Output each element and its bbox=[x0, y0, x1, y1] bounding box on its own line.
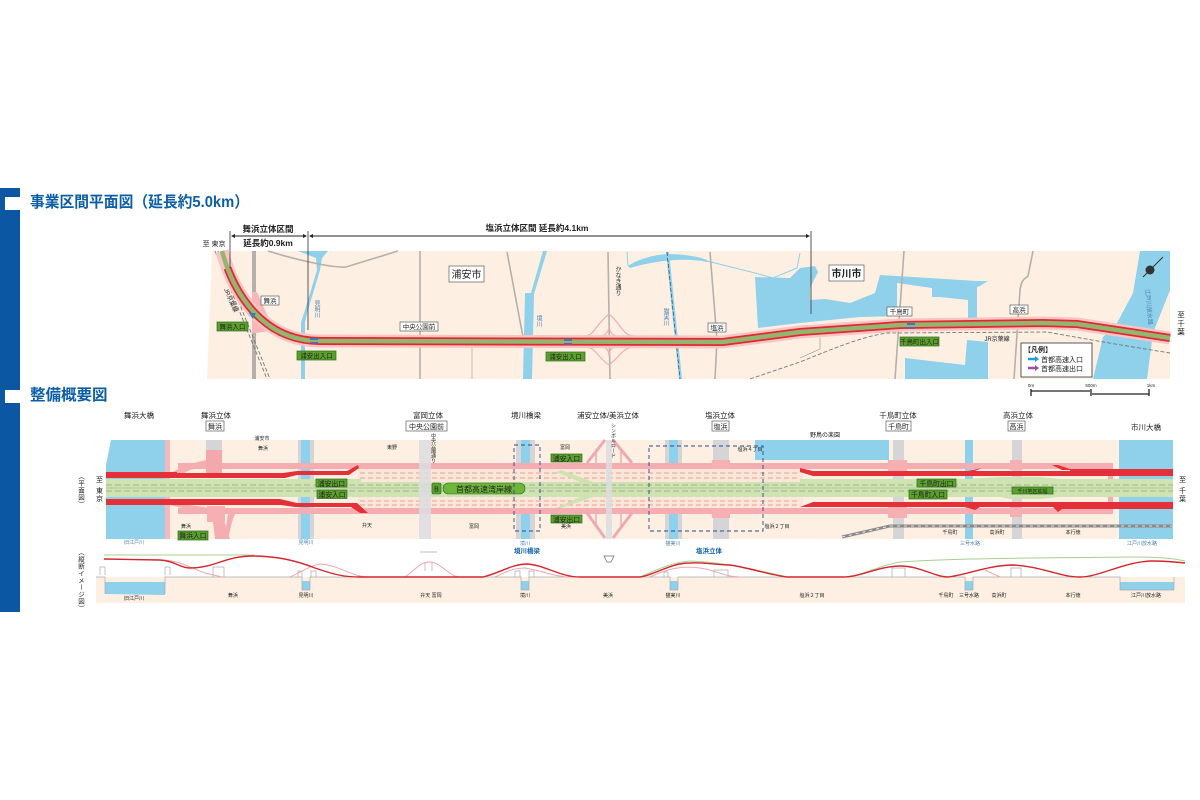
plan small labels: 弁天 bbox=[362, 522, 372, 529]
overview green labels: 千鳥町入口 bbox=[911, 490, 945, 499]
railway bbox=[842, 526, 1172, 537]
profile labels: 三号水路 bbox=[959, 592, 979, 599]
central light zone with dashes bbox=[358, 469, 803, 508]
new red lanes lower bbox=[106, 499, 368, 513]
station labels: 舞浜 bbox=[264, 296, 277, 305]
map small text: かなき通り bbox=[614, 266, 621, 296]
plan small labels: 江戸川放水路 bbox=[1127, 540, 1157, 547]
panel: plan map bbox=[207, 251, 1170, 379]
profile labels: 江戸川放水路 bbox=[1131, 592, 1161, 599]
legend: 首都高速出口 bbox=[1041, 364, 1083, 373]
column headers: 舞浜大橋 bbox=[124, 410, 154, 420]
overview green labels: 千川地区拡幅 bbox=[1017, 488, 1048, 495]
red elevation line bbox=[104, 556, 1185, 577]
dimension: Maihama section bbox=[203, 224, 308, 330]
column headers: 千鳥町立体 bbox=[879, 410, 917, 420]
legend bbox=[1021, 343, 1092, 377]
column headers bbox=[124, 410, 1161, 432]
plan small labels: 富岡 bbox=[469, 523, 479, 530]
streets over lanes bbox=[419, 440, 612, 539]
side labels bbox=[76, 473, 1186, 612]
scale bar bbox=[1028, 383, 1155, 396]
overview green labels: 千鳥町出口 bbox=[920, 479, 953, 488]
overview green labels: 浦安出口 bbox=[318, 479, 345, 488]
plan small labels: 舞浜 bbox=[258, 445, 268, 452]
maihama ramp bbox=[252, 292, 274, 333]
plan small labels: 東野 bbox=[387, 444, 397, 451]
legend: 【凡例】 bbox=[1024, 345, 1052, 354]
side roads bbox=[254, 251, 1033, 379]
heading: project section plan: 事業区間平面図（延長約5.0km） bbox=[30, 192, 249, 211]
cross streets bbox=[165, 440, 1022, 539]
expressway name badge: 首都高速湾岸線 bbox=[456, 484, 512, 494]
station labels: 中央公園前 bbox=[403, 322, 436, 331]
overview green labels: 舞浜入口 bbox=[179, 531, 207, 540]
plan small labels: 旧江戸川 bbox=[124, 539, 144, 546]
entrance labels: 浦安出入口 bbox=[300, 351, 333, 360]
sidebar band bbox=[0, 188, 20, 612]
column headers: 千鳥町 bbox=[888, 422, 909, 431]
profile labels: 見明川 bbox=[298, 593, 314, 599]
station labels: 塩浜 bbox=[710, 323, 724, 332]
plan small labels: 富岡 bbox=[560, 444, 570, 451]
profile labels: 境川 bbox=[520, 592, 530, 599]
dimension: Maihama section: 舞浜立体区間 bbox=[242, 224, 294, 234]
plan small labels bbox=[124, 423, 1157, 547]
interchange junction squares bbox=[206, 450, 1022, 522]
profile bridge piers bbox=[96, 552, 1174, 594]
scale bar: 0m bbox=[1028, 383, 1034, 388]
scale bar: 500m bbox=[1085, 383, 1097, 388]
column headers: 塩浜立体 bbox=[705, 410, 735, 420]
profile labels bbox=[124, 592, 1161, 602]
plan small labels: 中央公園通り bbox=[430, 432, 436, 464]
Urayasu interchange bbox=[587, 440, 632, 538]
column headers: 富岡立体 bbox=[413, 410, 443, 420]
plan small labels: シンボルロード bbox=[610, 423, 616, 458]
label: Ichikawa city: 市川市 bbox=[832, 267, 862, 280]
label: to Chiba (map): 至千葉 bbox=[1176, 311, 1186, 337]
map small text: 見明川 bbox=[313, 300, 320, 318]
overview green labels: 浦安入口 bbox=[318, 490, 346, 499]
dimension: Maihama section: 延長約0.9km bbox=[243, 238, 293, 248]
frontage roads bbox=[170, 460, 1113, 539]
column headers: 中央公園前 bbox=[409, 422, 444, 431]
plan small labels: 本行徳 bbox=[1065, 529, 1081, 536]
plan small labels: 浦安市 bbox=[254, 435, 270, 442]
column headers: 高浜 bbox=[1010, 422, 1024, 431]
map small text: 江戸川放水路 bbox=[1143, 289, 1155, 325]
side labels: 至 千葉 bbox=[1178, 476, 1186, 503]
road red outer bbox=[222, 251, 1170, 342]
map small text bbox=[222, 266, 1155, 343]
water bodies bbox=[298, 251, 1170, 379]
plan small labels: 見明川 bbox=[298, 540, 314, 546]
profile labels: 弁天 富岡 bbox=[420, 592, 442, 599]
column headers: 浦安立体/美浜立体 bbox=[577, 410, 640, 420]
railways bbox=[215, 251, 1170, 379]
scale bar: 1km bbox=[1147, 383, 1155, 388]
profile labels: 高浜町 bbox=[991, 592, 1007, 599]
interchange arrows bbox=[249, 313, 915, 345]
profile labels: 塩浜２丁目 bbox=[799, 592, 825, 599]
ground band bbox=[96, 577, 1185, 603]
plan small labels: 舞浜 bbox=[181, 523, 191, 530]
map small text: 猫実川 bbox=[662, 307, 669, 326]
plan small labels: 塩浜４丁目 bbox=[737, 446, 763, 453]
entrance labels: 浦安出入口 bbox=[549, 352, 582, 361]
plan small labels: 野鳥の楽園 bbox=[810, 431, 840, 439]
side labels: 至 東京 bbox=[96, 476, 103, 503]
map background bbox=[207, 251, 1170, 379]
expressway name badge: B bbox=[434, 486, 439, 494]
side labels: （縦断イメージ図） bbox=[76, 549, 85, 612]
dimension: Shiohama section bbox=[309, 223, 811, 314]
expressway lanes bbox=[106, 470, 1173, 508]
side labels: （平面図） bbox=[76, 473, 85, 508]
profile labels: 本行徳 bbox=[1065, 592, 1081, 599]
entrance labels: 千鳥町出入口 bbox=[900, 337, 939, 346]
existing road pink line bbox=[160, 560, 1000, 577]
overview green labels: 浦安出口 bbox=[553, 515, 580, 524]
heading: improvement overview: 整備概要図 bbox=[30, 386, 108, 404]
profile labels: 旧江戸川 bbox=[124, 595, 144, 602]
profile labels: 猫実川 bbox=[665, 592, 681, 599]
profile labels: 舞浜 bbox=[228, 592, 238, 599]
column headers: 舞浜 bbox=[208, 422, 222, 431]
plan small labels: 千鳥町 bbox=[942, 529, 958, 536]
column headers: 舞浜立体 bbox=[201, 410, 231, 420]
plan small labels: 塩浜２丁目 bbox=[764, 523, 790, 530]
river sections bbox=[105, 581, 1174, 595]
green line bbox=[104, 555, 1185, 577]
column headers: 高浜立体 bbox=[1003, 410, 1033, 420]
interchange ramps bbox=[585, 314, 634, 365]
Sakai river box bbox=[514, 445, 540, 531]
plan small labels: 境川 bbox=[520, 540, 530, 547]
map small text: 境川 bbox=[535, 314, 542, 327]
dimension: Maihama section: 至 東京 bbox=[203, 239, 225, 248]
new red lanes upper bbox=[106, 465, 1173, 513]
profile labels: 千鳥町 bbox=[938, 592, 954, 599]
label: Ichikawa city bbox=[829, 265, 864, 281]
compass icon bbox=[1143, 257, 1163, 277]
Shiohama section box bbox=[649, 446, 763, 531]
road green centre bbox=[222, 251, 1170, 342]
plan water bbox=[106, 440, 1173, 539]
column headers: 市川大橋 bbox=[1131, 422, 1161, 432]
label: Urayasu city bbox=[449, 266, 484, 282]
profile section names: 境川橋梁 bbox=[514, 546, 540, 555]
road casing bbox=[222, 251, 1170, 342]
entrance labels bbox=[217, 322, 939, 361]
station labels bbox=[261, 296, 1028, 332]
panel: longitudinal profile bbox=[96, 546, 1185, 603]
label: Urayasu city: 浦安市 bbox=[452, 268, 482, 281]
profile labels: 美浜 bbox=[603, 592, 613, 599]
column headers: 境川橋梁 bbox=[511, 410, 541, 420]
overview green labels bbox=[178, 454, 1053, 540]
map small text: JR京葉線 bbox=[222, 287, 240, 313]
panel: overview plan bbox=[106, 423, 1173, 547]
plan small labels: 猫実川 bbox=[665, 540, 681, 547]
plan small labels: 高浜町 bbox=[989, 529, 1005, 536]
legend: 首都高速入口 bbox=[1041, 355, 1083, 364]
station labels: 千鳥町 bbox=[890, 307, 910, 316]
expressway name badge bbox=[432, 483, 525, 494]
column headers: 塩浜 bbox=[714, 422, 728, 431]
plan small labels: 三号水路 bbox=[960, 540, 980, 547]
plan background bbox=[106, 440, 1173, 539]
station labels: 高浜 bbox=[1012, 305, 1026, 314]
map small text: JR京葉線 bbox=[984, 335, 1010, 343]
dimension: Shiohama section: 塩浜立体区間 延長約4.1km bbox=[486, 223, 589, 233]
entrance labels: 舞浜入口 bbox=[220, 322, 246, 331]
overview green labels: 浦安入口 bbox=[553, 454, 580, 463]
plan small labels: 美浜 bbox=[561, 523, 571, 530]
panel: longitudinal profile: 塩浜立体 bbox=[696, 546, 722, 555]
